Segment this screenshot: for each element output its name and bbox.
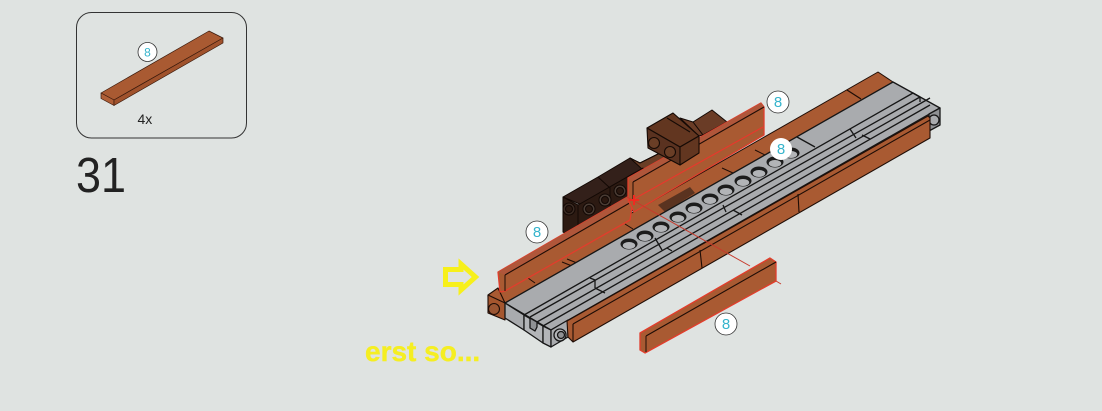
icon: brown plate part xyxy=(101,31,223,106)
badge: part 8 top: 8 xyxy=(774,94,782,111)
floating brown plate xyxy=(640,258,776,353)
highlighted plate: rear second xyxy=(628,103,764,212)
badge: part 8: 8 xyxy=(144,46,151,60)
quantity label: 4x xyxy=(138,111,152,127)
highlighted plate: rear first xyxy=(498,196,633,292)
rear brown plate xyxy=(490,72,893,303)
badge: part 8 middle xyxy=(770,138,792,160)
caption: erst so: erst so... xyxy=(365,336,480,367)
stud holes xyxy=(620,148,800,250)
brown end block with stud xyxy=(488,288,505,320)
badge: part 8 top xyxy=(767,91,789,113)
rear upper brown brick xyxy=(647,113,699,165)
badge: part 8 middle: 8 xyxy=(777,141,785,158)
assembly illustration xyxy=(488,72,940,353)
arrow: yellow pointer xyxy=(446,264,476,290)
badge: part 8 left xyxy=(526,221,548,243)
badge: part 8 xyxy=(138,42,157,62)
badge: part 8 left: 8 xyxy=(533,224,541,241)
badge: part 8 bottom: 8 xyxy=(722,316,730,333)
red placement guide lines xyxy=(627,195,781,284)
front brown plate xyxy=(567,116,930,342)
badge: part 8 bottom xyxy=(715,313,737,335)
step number: 31 xyxy=(76,149,126,203)
grey base xyxy=(505,82,940,347)
panel: parts callout xyxy=(76,12,246,138)
dark brown rear bricks xyxy=(563,110,727,240)
